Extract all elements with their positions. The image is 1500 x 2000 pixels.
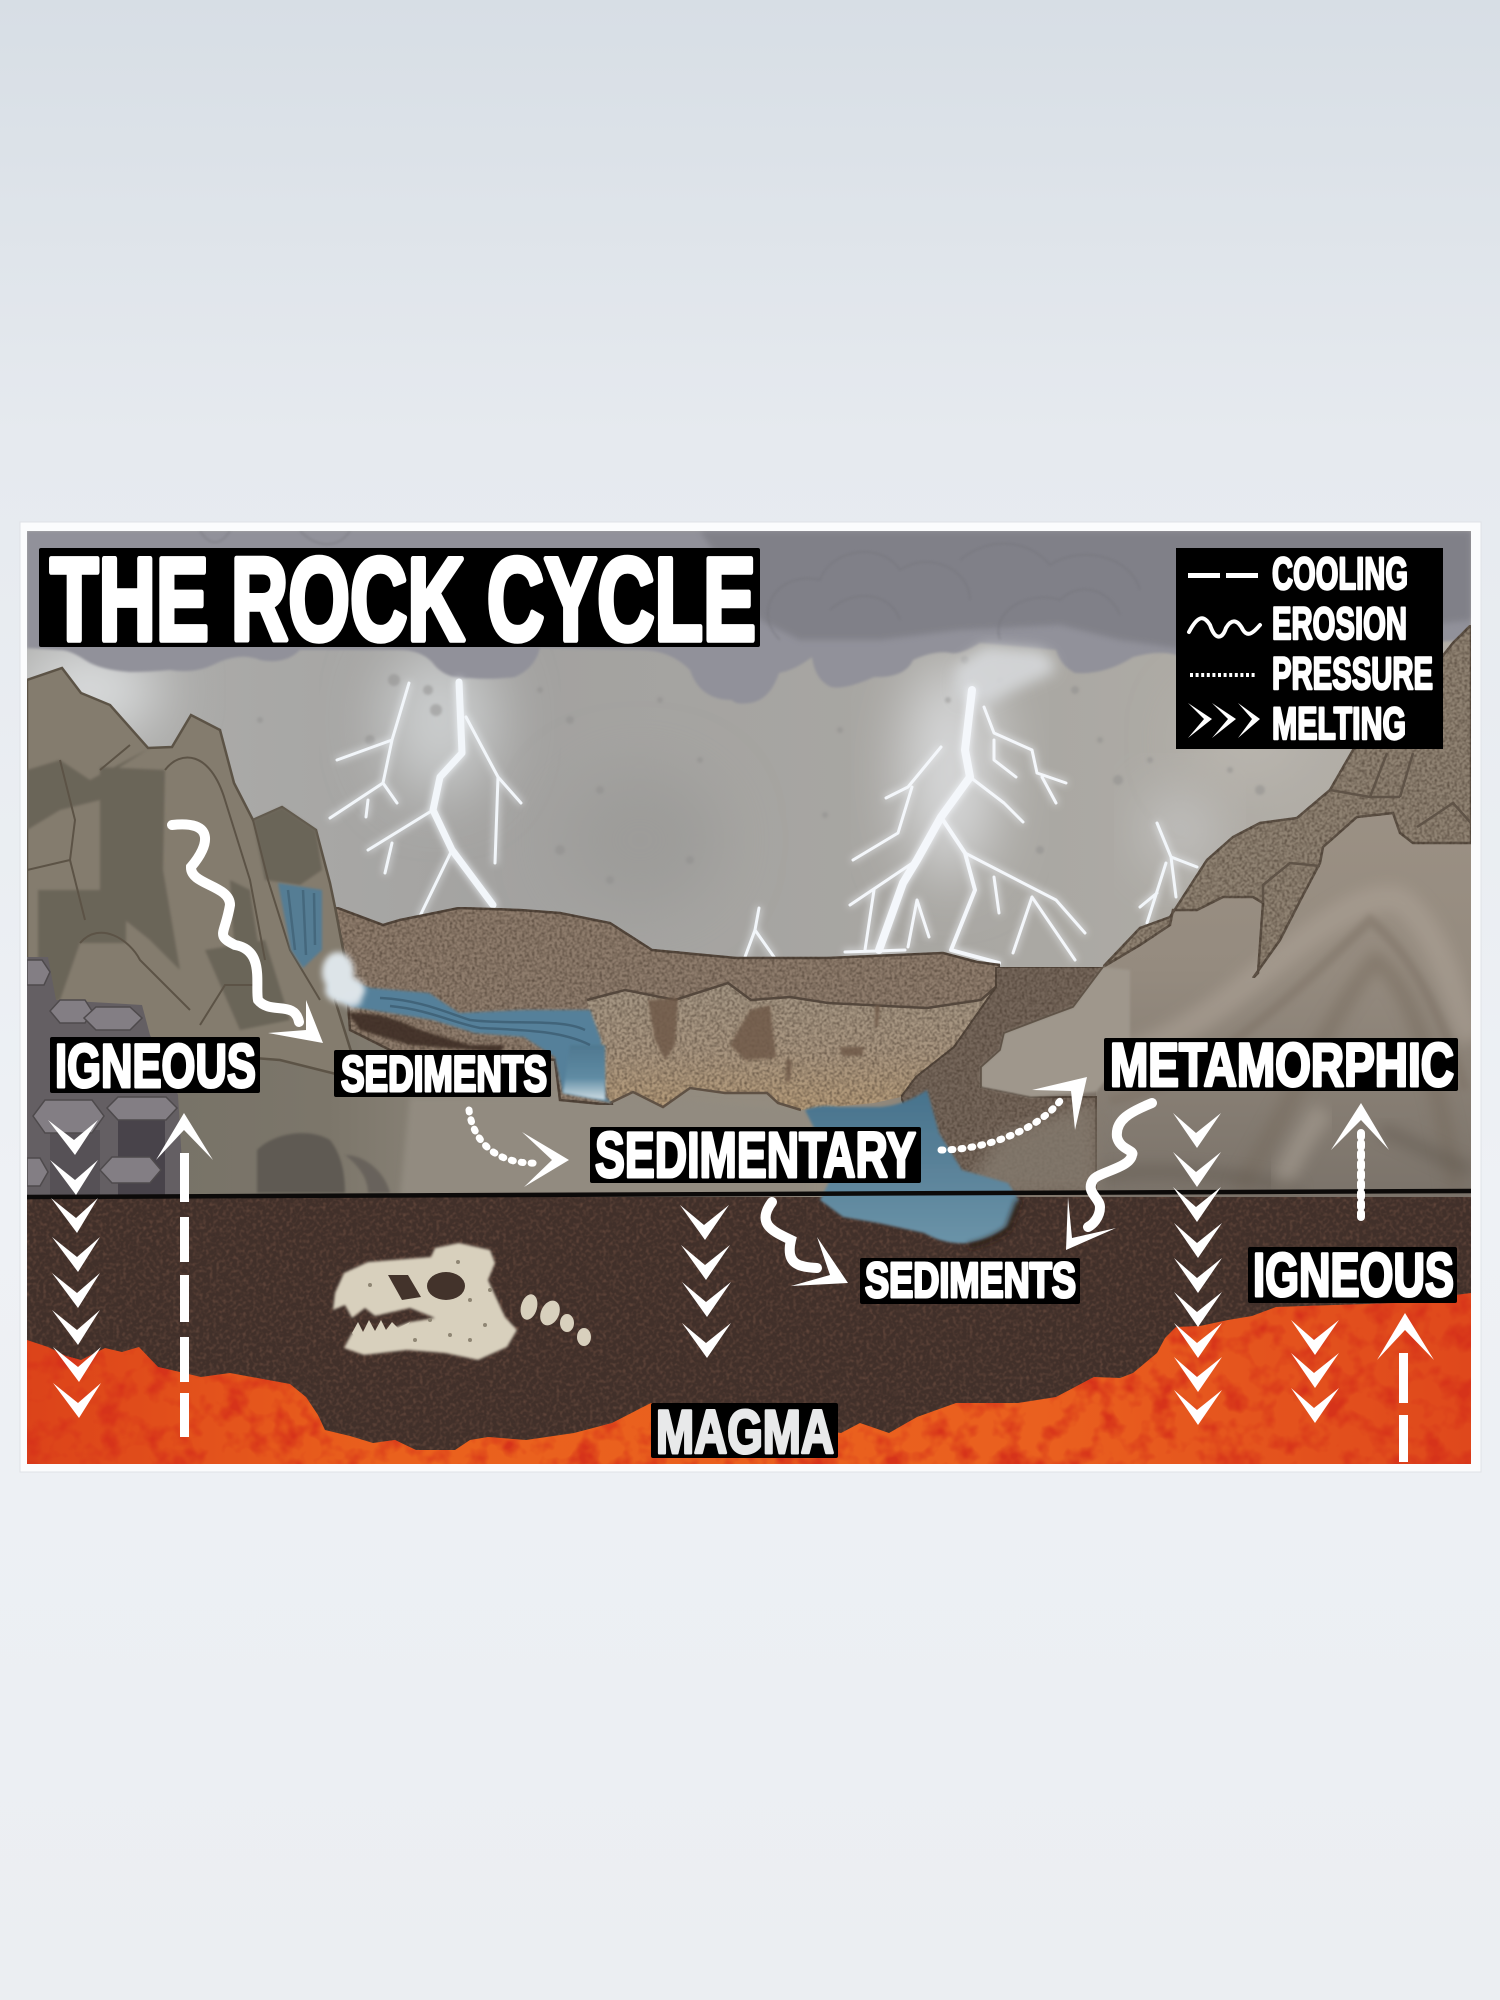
waterfall foam	[322, 952, 365, 1008]
stormy sky	[20, 531, 1471, 1011]
dinosaur skull fossil	[333, 1243, 591, 1360]
title	[39, 534, 760, 666]
cooling arrow: left	[156, 1113, 213, 1437]
illustration scene	[20, 531, 1471, 1464]
light grey outcrop	[981, 967, 1130, 1097]
lightning: left	[330, 682, 521, 918]
legend: erosion: EROSION	[1272, 598, 1407, 649]
melting chevrons: centre column	[680, 1205, 731, 1358]
lightning: small strikes	[745, 823, 1197, 957]
poster on wall	[0, 0, 1500, 1472]
legend	[1176, 548, 1443, 749]
lower ground above surface line	[177, 1000, 1096, 1197]
erosion arrow: metamorphic to sediments	[1066, 1103, 1152, 1250]
legend: cooling: COOLING	[1272, 548, 1408, 599]
hexagonal basalt columns	[27, 957, 184, 1197]
left mountain	[27, 668, 360, 1080]
melting chevrons: right column	[1173, 1113, 1222, 1425]
waterfall	[278, 883, 322, 968]
pressure arrow: to sedimentary	[469, 1110, 569, 1187]
river	[346, 984, 612, 1104]
erosion arrow: sedimentary to sediments	[766, 1202, 848, 1286]
pressure arrow: upward dotted	[1331, 1103, 1389, 1220]
lightning: centre	[845, 690, 1085, 963]
legend: cooling	[1188, 548, 1408, 599]
storm clouds	[27, 531, 1471, 705]
label: sediments upper: SEDIMENTS	[341, 1046, 547, 1102]
rain specks	[257, 656, 1265, 884]
poster white border	[20, 522, 1481, 1472]
erosion arrow: mountain to sediments	[172, 824, 323, 1043]
metamorphic folded strata	[1100, 898, 1471, 1190]
pressure arrow: to metamorphic	[941, 1077, 1087, 1150]
melting chevrons: left column	[48, 1120, 101, 1418]
cooling arrow: right	[1377, 1313, 1434, 1462]
label: magma: MAGMA	[656, 1398, 834, 1466]
right metamorphic mountain	[1096, 625, 1471, 1197]
middle plateau upper brown layer	[335, 907, 1000, 1105]
label: sediments lower: SEDIMENTS	[865, 1254, 1076, 1308]
melting chevrons: far right column	[1291, 1320, 1339, 1423]
label: igneous left: IGNEOUS	[55, 1032, 256, 1100]
magma layer	[27, 1293, 1471, 1464]
lake	[805, 1090, 1019, 1246]
title: THE ROCK CYCLE	[50, 534, 756, 666]
legend: melting: MELTING	[1272, 698, 1406, 749]
legend: melting	[1188, 698, 1406, 749]
legend: erosion	[1189, 598, 1407, 649]
surface line	[27, 1191, 1471, 1197]
tan sediment layer	[587, 983, 996, 1110]
right brown rock	[901, 967, 1130, 1195]
upper dark rock band	[1103, 625, 1471, 978]
label: sedimentary: SEDIMENTARY	[595, 1119, 916, 1191]
underground earth	[27, 1197, 1471, 1464]
